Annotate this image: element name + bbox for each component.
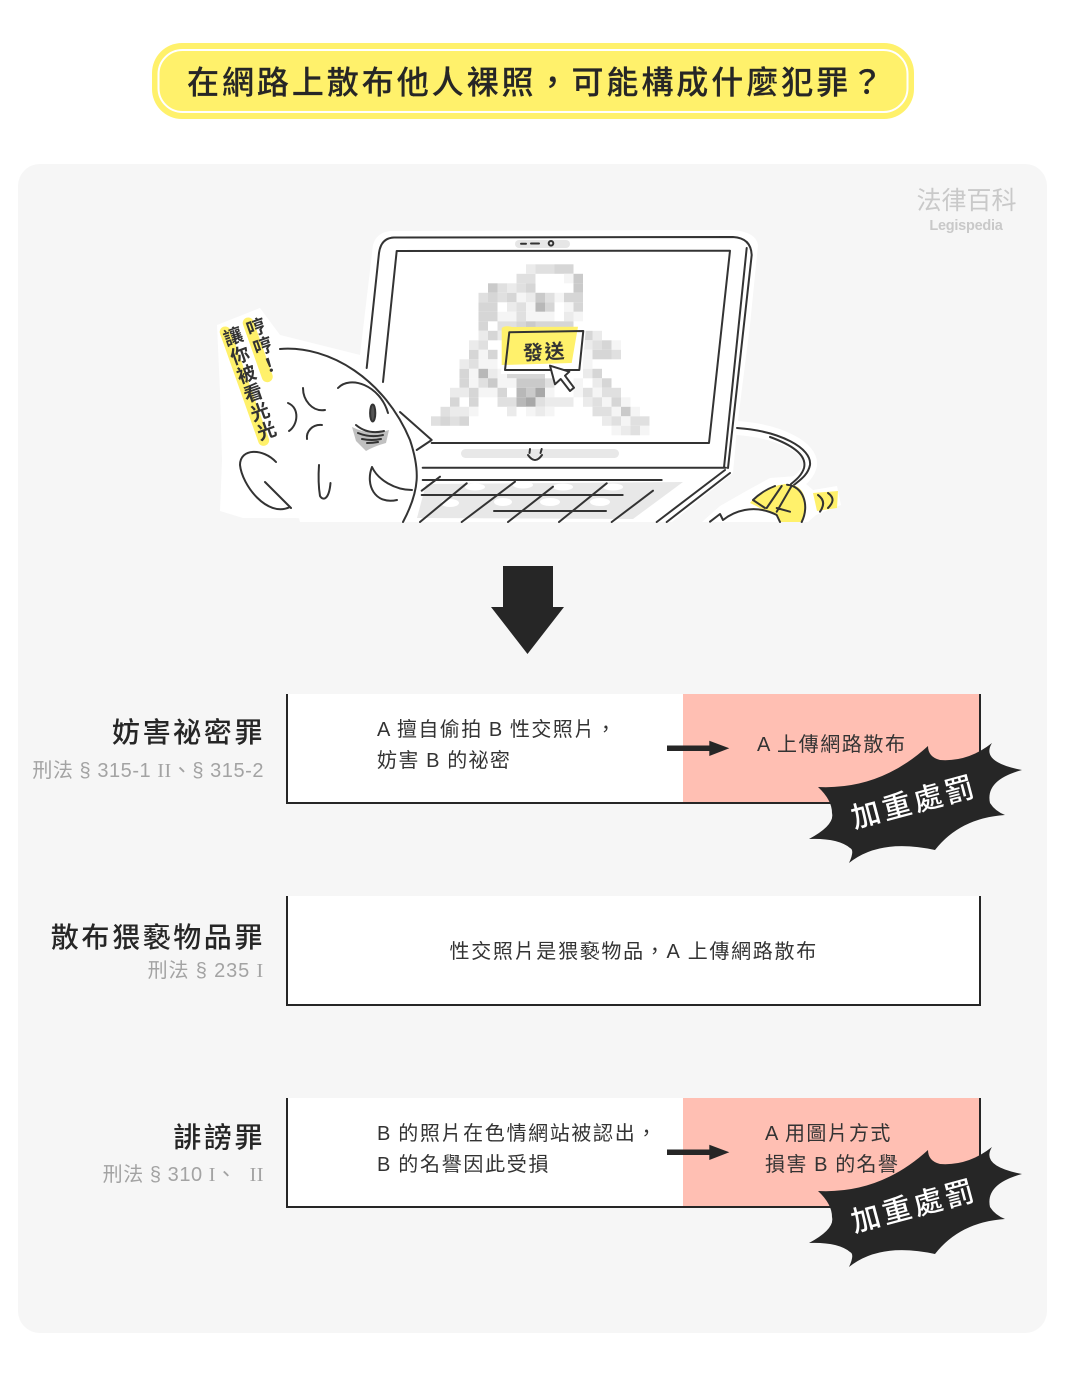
cause text — [377, 718, 617, 772]
brand watermark: Legispedia — [929, 218, 1004, 234]
box — [287, 896, 980, 1005]
keyboard shading — [417, 482, 683, 519]
laptop body — [367, 237, 752, 522]
burst badge: 加重處罰 — [848, 770, 981, 835]
white halo — [217, 230, 841, 522]
row 3: 誹謗罪 — [103, 1098, 1022, 1267]
box — [287, 694, 980, 803]
title banner — [152, 43, 914, 119]
result text: A 上傳網路散布 — [757, 733, 907, 756]
result text: 損害 B 的名譽 — [765, 1153, 899, 1176]
anger mark — [288, 388, 325, 439]
speech text: 讓你被看光光: 讓你被看光光 — [218, 323, 278, 444]
illustration: angry character uploading a photo on a laptop — [217, 230, 841, 522]
burst badge: 加重處罰 — [848, 1174, 981, 1239]
brand watermark — [916, 187, 1017, 234]
heading: 妨害祕密罪 — [112, 717, 265, 748]
mouth — [319, 465, 330, 499]
mouse cable — [737, 428, 810, 485]
webcam — [515, 240, 570, 248]
heading: 誹謗罪 — [173, 1122, 265, 1153]
cause text: 妨害 B 的祕密 — [377, 749, 511, 772]
hand — [240, 452, 291, 509]
big down arrow — [491, 566, 564, 654]
description: 性交照片是猥褻物品，A 上傳網路散布 — [450, 940, 818, 963]
laptop logo smile — [461, 449, 619, 460]
burst badge — [809, 1147, 1022, 1267]
row 1: 妨害祕密罪 — [32, 694, 1022, 863]
cursor arrow — [550, 366, 574, 391]
pixelated photo — [431, 264, 650, 435]
statute reference: 刑法 § 235 I — [148, 959, 264, 982]
cause text: A 擅自偷拍 B 性交照片， — [377, 718, 617, 741]
result text: A 用圖片方式 — [765, 1122, 892, 1145]
heading: 散布猥褻物品罪 — [51, 922, 265, 953]
arrow — [667, 1145, 729, 1160]
statute reference: 刑法 § 315-1 II、§ 315-2 — [32, 759, 264, 782]
eye and brow — [338, 382, 388, 422]
cause text: B 的名譽因此受損 — [377, 1153, 550, 1176]
arrow — [667, 741, 729, 756]
send button — [501, 326, 586, 374]
cause text — [377, 1122, 658, 1176]
result text — [765, 1122, 899, 1176]
cause text: B 的照片在色情網站被認出， — [377, 1122, 658, 1145]
mouse click marks — [813, 491, 838, 512]
row 2: 散布猥褻物品罪 — [51, 896, 980, 1005]
title banner: 在網路上散布他人裸照，可能構成什麼犯罪？ — [187, 64, 886, 100]
speech text: 哼哼！: 哼哼！ — [241, 315, 281, 379]
box — [287, 1098, 980, 1207]
dark eye circle — [352, 425, 389, 451]
character head — [240, 349, 432, 522]
arm — [370, 467, 412, 501]
send button: 發送 — [522, 340, 567, 365]
burst badge — [809, 743, 1022, 863]
statute reference: 刑法 § 310 I、 II — [103, 1163, 264, 1186]
mouse and hand — [710, 484, 805, 522]
brand watermark: 法律百科 — [916, 187, 1017, 215]
